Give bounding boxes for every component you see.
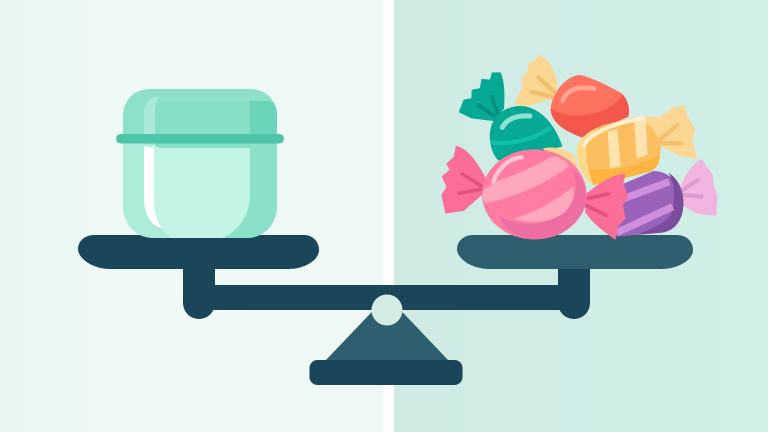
purple wrapper xyxy=(679,160,717,215)
lid inner tone xyxy=(155,101,250,148)
right post xyxy=(558,262,590,319)
panel: right background xyxy=(394,0,768,432)
jar body xyxy=(123,135,277,238)
right pink wrapper xyxy=(586,174,627,239)
purple candy xyxy=(617,171,683,237)
left pink wrapper xyxy=(442,147,485,213)
jar highlight xyxy=(144,146,163,228)
fulcrum triangle xyxy=(325,296,449,361)
teal candy xyxy=(490,106,562,161)
jar contents xyxy=(152,145,250,238)
lid right shade xyxy=(250,101,277,143)
large pink candy xyxy=(482,149,587,239)
lid left gloss xyxy=(144,97,160,145)
beam xyxy=(212,285,561,310)
jar lid xyxy=(123,89,277,140)
left post xyxy=(183,262,215,319)
pivot xyxy=(372,294,402,326)
base xyxy=(310,360,462,385)
right pan xyxy=(457,235,693,269)
balance scale xyxy=(78,235,693,385)
left pan xyxy=(78,235,319,269)
icon: candies xyxy=(442,56,717,239)
icon: jar xyxy=(116,89,284,238)
back yellow wrapper xyxy=(515,56,557,106)
hidden yellow wrapper xyxy=(543,147,580,173)
right yellow wrapper xyxy=(643,106,696,158)
orange candy xyxy=(577,117,661,185)
jar right shade xyxy=(220,140,277,238)
panel: left background xyxy=(0,0,383,432)
lid rim xyxy=(116,134,284,144)
teal wrapper xyxy=(460,73,503,120)
red candy xyxy=(551,75,629,137)
